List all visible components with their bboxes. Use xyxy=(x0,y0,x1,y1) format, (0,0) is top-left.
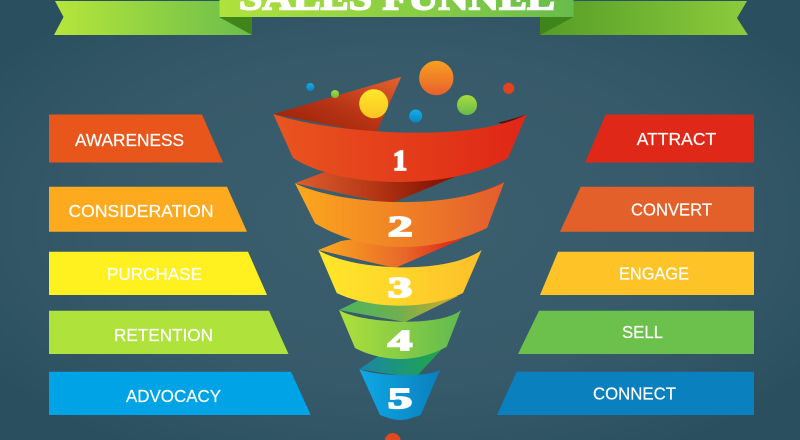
left label: retention: RETENTION xyxy=(114,325,213,345)
funnel tier 2 xyxy=(295,165,504,247)
funnel tier 1: 1 xyxy=(393,146,407,177)
left label: purchase xyxy=(49,252,267,295)
left label: consideration: CONSIDERATION xyxy=(68,201,214,221)
right ribbon fold xyxy=(540,17,573,35)
funnel tier 4: 4 xyxy=(388,326,412,357)
left ribbon tail xyxy=(54,1,252,35)
right label: convert xyxy=(560,187,754,232)
right label: sell: SELL xyxy=(622,322,663,342)
funnel xyxy=(273,77,527,420)
left label: consideration xyxy=(49,187,247,232)
ball: small blue xyxy=(306,83,314,91)
center ribbon xyxy=(220,0,574,17)
right label: connect: CONNECT xyxy=(593,384,676,404)
funnel tier 4 xyxy=(339,292,461,359)
funnel tier 5: 5 xyxy=(388,384,412,415)
balls xyxy=(306,61,514,440)
ball: blue xyxy=(409,110,422,122)
ball: orange xyxy=(419,61,453,95)
ball: red xyxy=(503,83,514,94)
right label: convert: CONVERT xyxy=(631,199,712,219)
left label: advocacy xyxy=(49,372,311,415)
funnel tier 3 xyxy=(318,232,482,306)
left label: awareness xyxy=(49,114,223,162)
right label: sell xyxy=(518,311,754,354)
left label: retention xyxy=(49,311,288,354)
ball: green xyxy=(457,95,477,115)
left ribbon fold xyxy=(219,17,252,35)
left label: purchase: PURCHASE xyxy=(107,264,202,284)
right label: attract xyxy=(585,114,754,162)
right ribbon tail xyxy=(540,1,748,35)
right label: connect xyxy=(497,372,754,415)
ball: small green xyxy=(331,90,339,98)
ball: bottom red xyxy=(385,433,401,440)
funnel tier 2: 2 xyxy=(388,212,412,243)
funnel tier 5 xyxy=(359,350,441,420)
title banner xyxy=(54,0,748,35)
right label: engage xyxy=(540,252,754,295)
right label: engage: ENGAGE xyxy=(619,263,689,283)
left label: advocacy: ADVOCACY xyxy=(126,386,221,406)
funnel tier 3: 3 xyxy=(388,273,412,304)
funnel tier 1 xyxy=(273,77,527,182)
ball: yellow xyxy=(359,89,388,118)
right label: attract: ATTRACT xyxy=(637,129,716,149)
left label: awareness: AWARENESS xyxy=(75,130,184,150)
